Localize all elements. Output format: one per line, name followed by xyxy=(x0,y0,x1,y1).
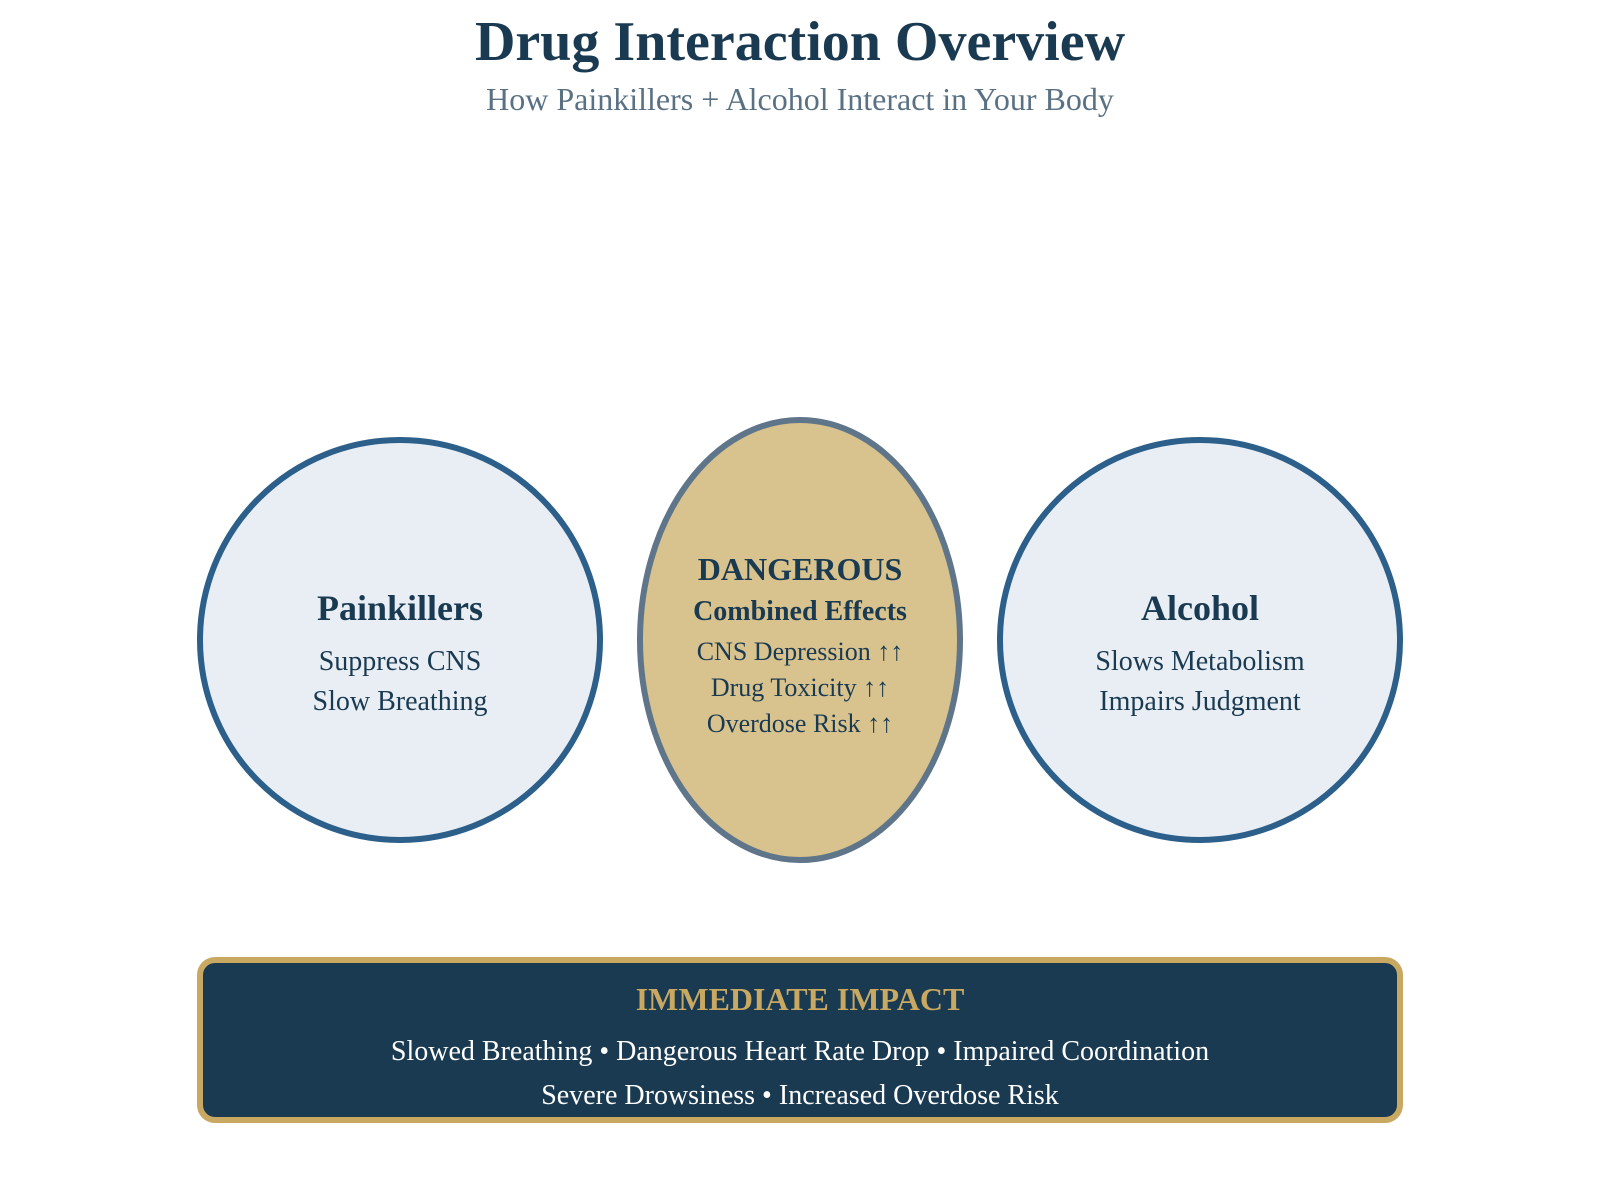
panel: combined effects ellipse: Combined Effects xyxy=(693,596,907,627)
title: Drug Interaction Overview xyxy=(475,11,1126,73)
panel: alcohol circle: Alcohol xyxy=(1141,588,1259,628)
panel: immediate impact xyxy=(200,960,1400,1120)
panel: alcohol circle: Impairs Judgment xyxy=(1099,686,1301,717)
panel: combined effects ellipse: Overdose Risk ↑↑ xyxy=(707,709,893,738)
panel: painkillers circle: Slow Breathing xyxy=(312,686,488,717)
panel: combined effects ellipse: DANGEROUS xyxy=(698,551,902,587)
panel: combined effects ellipse: Drug Toxicity ↑↑ xyxy=(711,673,889,702)
panel: painkillers circle: Painkillers xyxy=(317,588,483,628)
panel: painkillers circle: Suppress CNS xyxy=(319,646,481,677)
panel: alcohol circle xyxy=(1000,440,1400,840)
panel: combined effects ellipse xyxy=(640,420,960,860)
panel: painkillers circle xyxy=(200,440,600,840)
panel: immediate impact: IMMEDIATE IMPACT xyxy=(636,981,964,1017)
panel: combined effects ellipse: CNS Depression ↑↑ xyxy=(697,637,903,666)
panel: immediate impact: Slowed Breathing • Dangerous Heart Rate Drop • Impaired Coordination xyxy=(391,1036,1209,1067)
panel: immediate impact: Severe Drowsiness • Increased Overdose Risk xyxy=(541,1080,1059,1111)
panel: alcohol circle: Slows Metabolism xyxy=(1095,646,1305,677)
subtitle: How Painkillers + Alcohol Interact in Your Body xyxy=(486,81,1114,117)
